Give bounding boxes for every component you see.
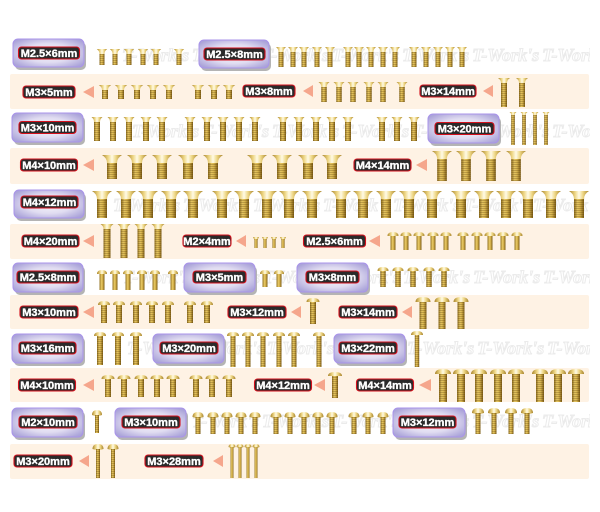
watermark pattern: T-Work's T-Work's T-Work's T-Work's T-Work's T-Work's T-Work's (122, 45, 600, 65)
badge: M3×5mm (184, 263, 257, 295)
screws: M3×8mm (318, 82, 408, 102)
arrow (83, 306, 94, 318)
badge: M3×12mm (393, 408, 467, 440)
arrow (483, 85, 493, 97)
badge: M2×10mm: M2×10mm (21, 417, 75, 429)
arrow (402, 306, 412, 318)
panel: row 7, button head (13, 263, 450, 295)
badge: M3×20mm: M3×20mm (162, 343, 216, 355)
screws: M3×12mm (472, 408, 533, 434)
label: M4×14mm: M4×14mm (356, 160, 409, 172)
badge: M2.5×8mm: M2.5×8mm (20, 272, 76, 284)
watermark pattern: T-Work's T-Work's T-Work's T-Work's T-Work's T-Work's T-Work's (123, 267, 600, 287)
screw: M4×12mm (328, 372, 342, 398)
screws: M3×5mm (99, 85, 235, 99)
screws: M3×20mm (92, 444, 118, 478)
watermark pattern (113, 45, 600, 431)
arrow (314, 379, 325, 391)
screws: M3×14mm (498, 78, 528, 107)
badge: M4×12mm (14, 190, 86, 221)
label: M4×14mm: M4×14mm (358, 380, 412, 392)
panel: row 5, flat head M4 (14, 190, 589, 221)
arrow (83, 86, 94, 98)
arrow (303, 85, 313, 97)
badge: M2.5×8mm: M2.5×8mm (206, 49, 263, 61)
badge: M2×10mm (12, 408, 85, 440)
label: M3×10mm: M3×10mm (22, 307, 76, 319)
badge: M3×20mm: M3×20mm (438, 124, 491, 136)
badge: M3×20mm (428, 114, 501, 146)
screw: M2×10mm (92, 410, 102, 433)
screws: M3×14mm (416, 297, 468, 329)
label: M3×14mm: M3×14mm (421, 86, 475, 98)
panel: row 9, button head M3 long (12, 331, 423, 367)
arrow (83, 159, 94, 171)
badge: M3×5mm: M3×5mm (196, 272, 243, 284)
label: M2.5×6mm: M2.5×6mm (306, 236, 363, 248)
badge: M3×22mm (334, 334, 407, 366)
label: M4×10mm: M4×10mm (22, 160, 76, 172)
arrow (83, 379, 94, 391)
label: M3×5mm: M3×5mm (25, 87, 73, 99)
arrow (213, 455, 223, 467)
screws: M3×10mm (92, 117, 420, 141)
screw: M3×12mm (306, 298, 320, 324)
screws: M2.5×6mm (388, 232, 522, 250)
badge: M2.5×8mm (13, 263, 85, 295)
label: M3×14mm: M3×14mm (341, 307, 395, 319)
badge: M4×12mm: M4×12mm (23, 197, 76, 209)
label: M3×8mm: M3×8mm (245, 86, 293, 98)
screws: M3×28mm (228, 444, 260, 478)
badge: M3×12mm: M3×12mm (401, 417, 454, 429)
label: M3×28mm: M3×28mm (147, 456, 201, 468)
panel: row 2, flat head M3 (10, 74, 589, 109)
arrow (419, 379, 431, 391)
screws: M2.5×8mm (97, 270, 178, 290)
screw: M3×22mm (411, 331, 423, 367)
arrow (83, 235, 94, 247)
arrow (369, 235, 380, 247)
screws: M4×10mm (102, 155, 342, 179)
screws: M4×10mm (102, 375, 236, 397)
arrow (79, 455, 89, 467)
arrow (291, 306, 301, 318)
screws: M4×12mm (92, 191, 589, 218)
screws: M2.5×6mm (97, 49, 184, 65)
badge: M3×10mm (115, 408, 188, 440)
arrow (416, 159, 427, 171)
badge: M3×10mm: M3×10mm (124, 417, 178, 429)
panel: row 8, button head M3 (10, 295, 589, 329)
badge: M3×10mm: M3×10mm (21, 122, 74, 134)
panel: row 1, flat head M2.5 (13, 39, 467, 71)
screws: M3×20mm (227, 332, 325, 367)
watermark pattern: T-Work's T-Work's T-Work's T-Work's T-Work's T-Work's T-Work's (113, 195, 600, 215)
screws: M3×8mm (378, 267, 450, 287)
label: M4×12mm: M4×12mm (256, 380, 310, 392)
badge: M3×16mm (12, 334, 85, 366)
screws: M3×5mm (260, 270, 284, 287)
badge: M2.5×6mm (13, 39, 86, 70)
panel: row 11, pan head (12, 408, 533, 440)
watermark pattern: T-Work's T-Work's T-Work's T-Work's T-Work's T-Work's (192, 411, 600, 431)
screws: M2×4mm (253, 237, 286, 248)
screws: M3×20mm (510, 112, 550, 145)
label: M4×20mm: M4×20mm (24, 236, 77, 248)
screws: M3×10mm (98, 301, 213, 323)
badge: M2.5×8mm (199, 40, 271, 71)
screws: M4×14mm (432, 151, 526, 181)
label: M2×4mm: M2×4mm (183, 236, 231, 248)
screws: M4×20mm (100, 224, 164, 258)
label: M4×10mm: M4×10mm (20, 380, 74, 392)
label: M3×20mm: M3×20mm (16, 456, 70, 468)
badge: M3×10mm (12, 113, 85, 145)
badge: M3×22mm: M3×22mm (341, 343, 395, 355)
panel: row 12, pan head long (10, 444, 589, 479)
badge: M2.5×6mm: M2.5×6mm (21, 48, 77, 60)
badge: M3×20mm (153, 334, 226, 366)
screws: M3×16mm (94, 332, 142, 365)
screws: M4×14mm (435, 369, 584, 402)
panel: row 4, flat head M4 (10, 148, 589, 184)
screws: M3×10mm (192, 412, 388, 434)
arrow (236, 235, 246, 247)
badge: M3×8mm: M3×8mm (309, 272, 356, 284)
panel: row 3, flat head M3 (12, 112, 550, 146)
panel: row 6, mixed (10, 224, 589, 259)
screws: M2.5×8mm (276, 47, 467, 67)
label: M3×12mm: M3×12mm (230, 307, 284, 319)
watermark pattern: T-Work's T-Work's T-Work's T-Work's T-Work's T-Work's T-Work's (127, 338, 600, 358)
badge: M3×8mm (297, 263, 370, 295)
badge: M3×16mm: M3×16mm (21, 343, 74, 355)
panel: row 10, button head M4 (10, 368, 589, 402)
